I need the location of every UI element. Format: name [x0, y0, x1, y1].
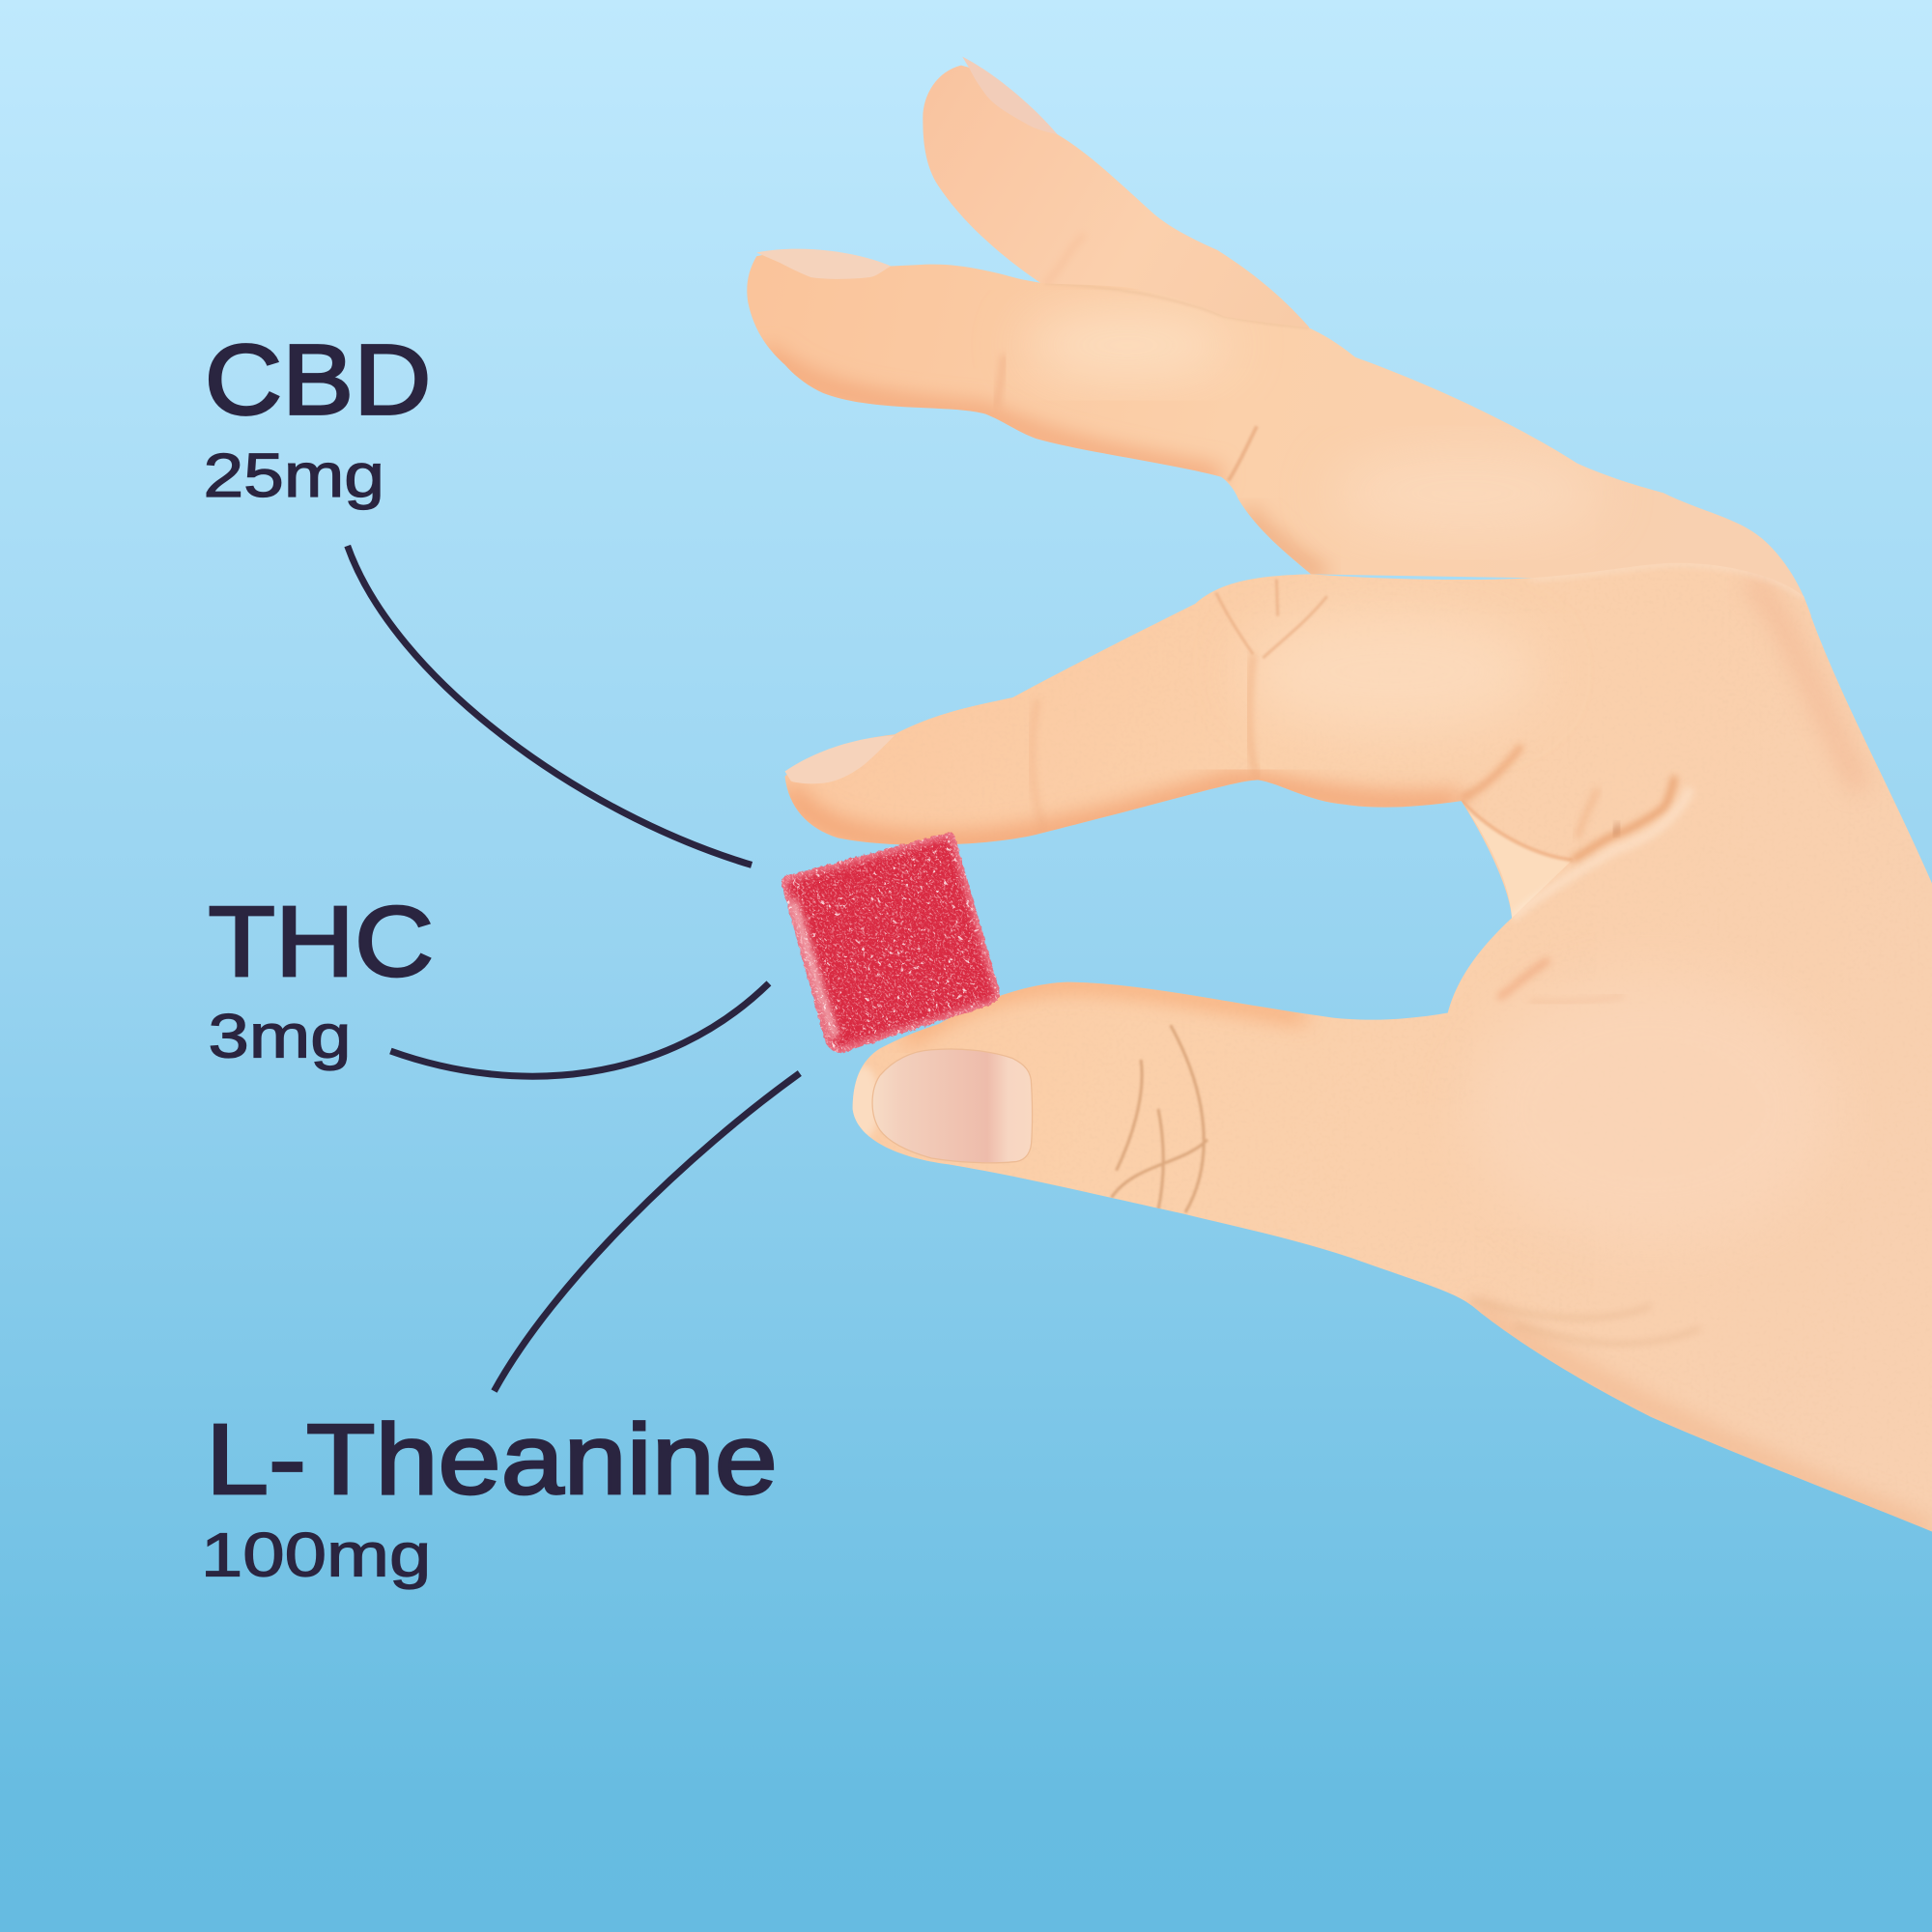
- label: CBD 25mg: [203, 324, 431, 510]
- fingernail: middle finger: [784, 735, 895, 783]
- palm, middle finger and thumb: [784, 562, 1932, 1548]
- web between fingers: [1462, 801, 1573, 918]
- label: THC 3mg: THC: [209, 885, 434, 997]
- label: THC 3mg: 3mg: [209, 1001, 352, 1070]
- callout line: CBD: [348, 546, 752, 865]
- thumbnail: [872, 1049, 1033, 1163]
- label: L-Theanine 100mg: [201, 1403, 778, 1589]
- label: L-Theanine 100mg: L-Theanine: [206, 1403, 778, 1515]
- nail: index finger: [756, 249, 891, 279]
- label: CBD 25mg: CBD: [205, 324, 431, 436]
- label: L-Theanine 100mg: 100mg: [201, 1520, 431, 1589]
- label: CBD 25mg: 25mg: [203, 440, 384, 510]
- nail: back finger: [962, 57, 1057, 134]
- callout line: L-Theanine: [494, 1073, 800, 1391]
- photo: hand holding gummy: [747, 57, 1932, 1548]
- back finger: [923, 57, 1324, 357]
- label: THC 3mg: [209, 885, 434, 1070]
- callout line: THC: [390, 983, 769, 1076]
- red sugar gummy: [777, 828, 1006, 1057]
- index finger: [747, 249, 1811, 616]
- thumb creases: [1112, 1025, 1208, 1212]
